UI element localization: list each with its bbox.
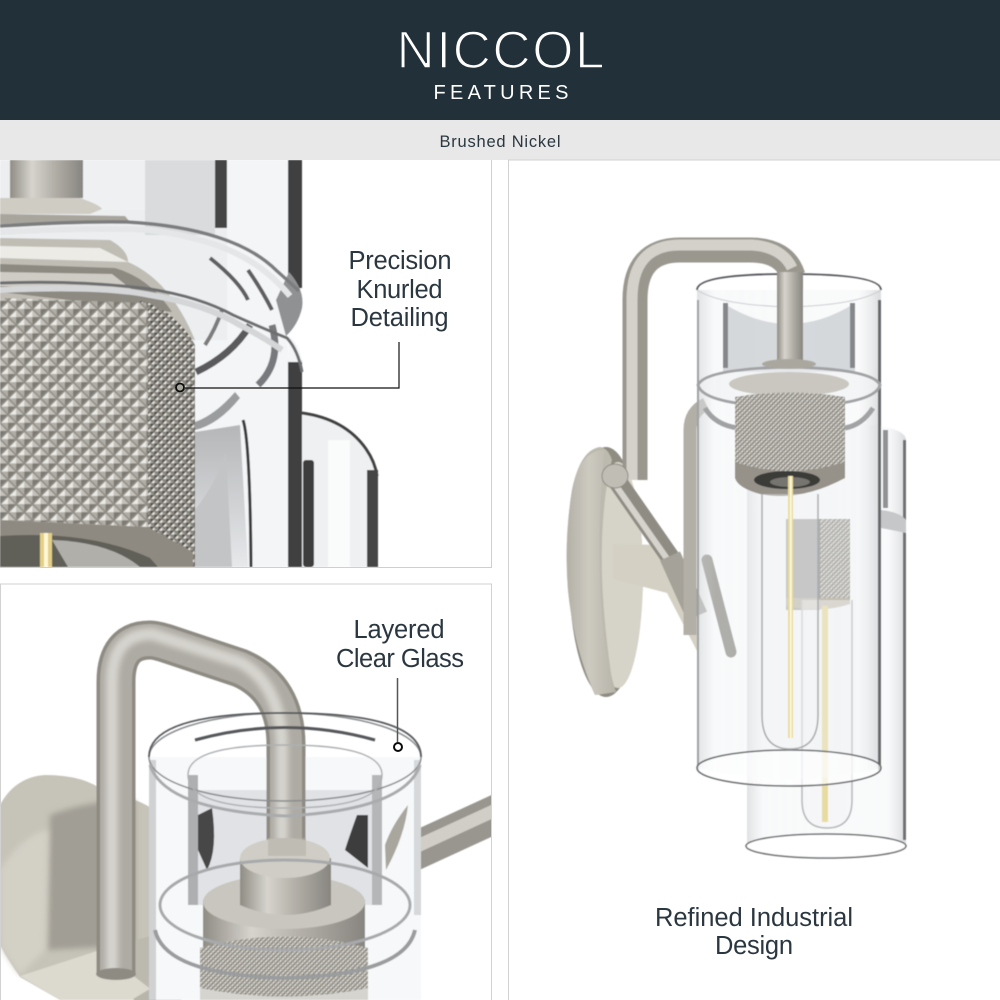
panel: precision knurled detailing <box>0 160 492 568</box>
panel: layered clear glass <box>0 584 500 1000</box>
label: Precision Knurled Detailing: Precision <box>348 247 452 275</box>
label: Precision Knurled Detailing <box>348 247 452 332</box>
socket cap <box>203 838 365 950</box>
callout line <box>396 678 398 742</box>
callout line <box>185 342 399 388</box>
label: Refined Industrial Design: Refined Industrial <box>655 904 853 932</box>
label: Precision Knurled Detailing: Detailing <box>350 304 448 332</box>
reflections below ring <box>195 258 288 567</box>
fixture illustration <box>567 245 906 858</box>
glass ring lower highlight <box>0 288 282 350</box>
arm rod to fixture <box>140 808 500 1000</box>
glass top rim <box>149 713 421 816</box>
glass ring highlight <box>146 227 292 298</box>
socket neck <box>0 160 195 340</box>
lower glass rim <box>155 930 415 978</box>
callout marker <box>394 743 402 751</box>
rear glass shade <box>302 412 378 567</box>
wall mount block <box>613 544 697 651</box>
glass ring lower <box>0 282 302 372</box>
rear bulb <box>802 600 852 828</box>
label: Refined Industrial Design: Design <box>715 932 793 960</box>
label: Layered Clear Glass <box>336 616 464 673</box>
wall backplate <box>1 774 150 1000</box>
lower glass ring <box>160 860 410 950</box>
subtitle: FEATURES: FEATURES <box>434 82 568 104</box>
finish band <box>0 120 1000 160</box>
glass ring <box>698 359 880 428</box>
diagonal arm rod <box>602 464 731 652</box>
label: Refined Industrial Design <box>655 904 853 960</box>
title: NICCOL: NICCOL <box>396 21 604 80</box>
panel: full fixture view <box>508 160 1000 1000</box>
callout marker <box>176 384 184 392</box>
finish label: Brushed Nickel <box>440 133 560 151</box>
curved arm <box>632 245 793 480</box>
rear socket <box>786 519 850 610</box>
glass ring upper <box>0 222 299 291</box>
wall backplate <box>567 447 643 697</box>
glass shade body <box>149 757 421 1000</box>
main glass shade <box>697 274 881 786</box>
arm curved tube <box>96 634 286 980</box>
arm reflection through glass <box>690 404 706 635</box>
knurled collar peek <box>200 936 368 1000</box>
knurled collar <box>0 298 195 567</box>
header banner <box>0 0 1000 120</box>
rear glass shade <box>746 423 906 858</box>
front glass shade <box>0 160 302 567</box>
label: Precision Knurled Detailing: Knurled <box>356 276 442 304</box>
label: Layered Clear Glass: Clear Glass <box>336 645 464 673</box>
stem <box>777 272 803 360</box>
knurled socket <box>735 392 845 496</box>
label: Layered Clear Glass: Layered <box>354 616 444 644</box>
main bulb <box>762 476 818 749</box>
